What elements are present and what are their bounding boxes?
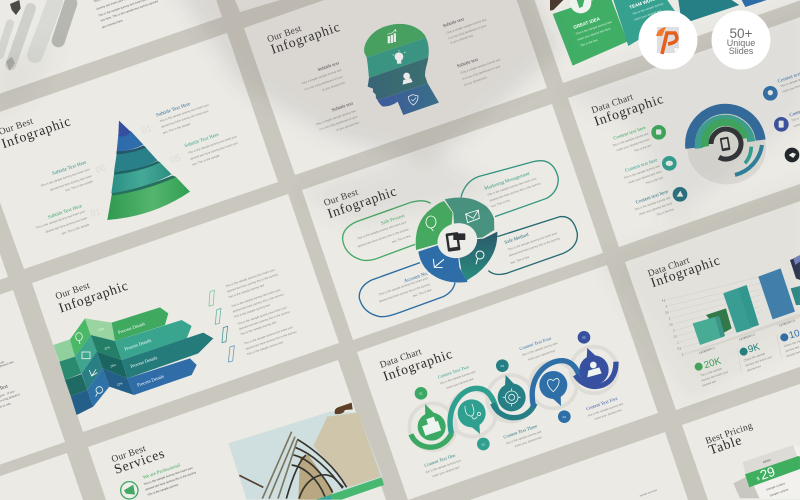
icon: phone [445,232,465,252]
text: content three: this is the sample dummy text [506,429,542,445]
step numbers: 03 [501,364,504,368]
category labels: CATEGORY 2 [738,332,756,342]
text: content four: insert your desired text [527,348,556,362]
text: content four: this is the sample dummy text [522,341,558,357]
text: we are professional: We are Professional [142,463,182,481]
text: subtitle top right: Subtitle text [442,16,465,28]
bars [693,255,800,345]
text: account no: text. This is fine [412,288,432,298]
text: process notes: desired text here dummy this is the dummy [232,292,285,314]
text: subtitle upper left: of your desired text [321,80,346,92]
icon: phone [720,137,731,151]
text: subtitle mid right: This is the sample dummy text insert your [187,134,238,155]
grid and axis labels: 2 [673,329,675,332]
text: account no [378,271,432,303]
text: subtitle mid left: text. This is the sample [65,179,94,192]
text: subtitle lower right: of your desired text [463,75,487,87]
text: marketing management: Marketing Management [484,171,531,192]
stat: 9K: desired text [746,364,762,373]
text: process notes: This is the sample dummy text [240,320,277,336]
text: process notes: This is the sample dummy text insert your [243,325,294,346]
title: Infographic [57,278,130,315]
icon: bulb [393,50,406,64]
text: content one: insert your desired text [432,465,460,478]
text: content five: Content Text Five [585,396,618,411]
stat: 10 [780,328,800,358]
card: team work: insert your desired text [634,8,662,22]
text: account no: Account No. [404,271,429,284]
text: subtitle mid right: text. This is the sample [192,153,221,167]
step numbers: 02 [482,442,485,446]
text: content one [424,453,462,478]
text: left column: This is the sample dummy text [612,131,649,148]
text: content two: this is the sample dummy text [440,369,476,385]
icon: bar chart [387,29,396,43]
text: left column: Content text here [613,126,647,142]
text: subtitle upper right: This is the sample dummy text insert your [159,103,209,123]
card: team work [613,0,678,46]
icon badges [651,86,799,202]
stat: 9K: Check the sample [743,351,766,363]
grid and axis labels: 4.5 [662,299,666,302]
text: marketing management [484,171,542,208]
text: content two: Content Text Two [437,364,470,380]
text: safe method: desired text here dummy this is the dummy [508,236,561,258]
grid and axis labels: 1 [677,341,679,344]
text: subtitle mid left: desired text here dummy text insert [49,174,93,192]
pricing card: Sample content [769,487,789,498]
text: subtitle upper left [301,60,346,92]
text: safe process: This is the sample dummy text insert your [357,220,407,241]
clip icons [209,290,234,362]
slide: semi-circular data chart [590,72,800,217]
slide: top-left photo collage: text inserted here [101,18,124,29]
text: process notes: This is the sample dummy text insert your [231,288,281,308]
slide: services [110,403,384,500]
faint step numbers: 06 [94,162,107,175]
text: subtitle mid right: desired text here dummy text insert your [190,141,238,161]
grid and axis labels [662,277,773,356]
text: subtitle upper left: in a row a big dashboard of your [304,74,343,91]
stat: 20K: This is the sample [700,366,723,378]
step numbers: 04 [563,415,566,419]
stat: 9K: 9K [747,341,762,356]
title: Best Pricing [704,421,754,447]
text: account no: This is the sample dummy text insert your [378,276,429,297]
text: left column 2: Content text here [625,158,659,174]
text: safe method [504,231,561,265]
text: safe process: Safe Process [380,214,406,227]
pricing card: BASIC [762,458,772,464]
chart floor [683,313,800,355]
text: content four [519,335,558,362]
card: great idea: insert your desired text here [577,26,611,42]
ribbon labels: Process Details [136,374,165,388]
faint step numbers: 01 [140,123,153,136]
text: left column [612,126,652,153]
title: Services [112,445,167,477]
text: we are professional: desired text here dummy this is the dummy [145,470,197,492]
timeline wave [411,361,616,447]
text: content one: this is the sample dummy text [425,458,462,474]
text: subtitle lower left: Subtitle Text Here [47,204,84,221]
cycle ring [416,197,497,283]
ribbon labels: Process Details [130,355,158,369]
text: subtitle lower right: in a row a big dashboard of your [462,64,501,81]
text: content three: insert your desired text [514,435,542,448]
text: content five: this is the sample dummy text [587,402,624,418]
photo [228,403,384,500]
text: left column: This is the text [634,143,652,153]
grid and axis labels: 3 [669,317,671,320]
title: Data Chart [590,92,635,116]
icon: magnifier [476,251,484,264]
text: process notes: This is the sample dummy text [246,340,284,356]
step numbers: 05 [582,336,586,340]
slide: circular cycle infographic [323,161,577,317]
badge: PowerPoint logo [638,10,698,70]
pill: marketing management [461,161,558,217]
text: content two: insert your desired text [446,377,474,390]
text: subtitle mid right: Subtitle Text Here [184,133,220,149]
stat: 10: dummy text [785,345,800,353]
icon: arrow [433,259,444,268]
faint step numbers: 05 [169,152,182,165]
title: Data Chart [379,347,423,371]
text: subtitle upper right [156,102,209,135]
ambient light shadows [0,0,800,400]
title: Our Best [323,188,360,209]
slide: top-left photo collage [0,0,159,71]
icon: megaphone [121,482,138,499]
stat: 20K: desired text [702,379,717,388]
text: process notes: desired text here dummy this is the dummy [238,309,291,331]
pricing card [733,445,800,499]
text: content three: Content Text Three [503,423,538,440]
text: process notes: desired text here dummy this is the dummy [226,272,279,294]
text: subtitle upper left: Subtitle text [317,60,340,72]
ribbon labels [98,321,165,388]
text: subtitle mid left: Subtitle Text Here [52,160,88,177]
ribbon labels: Process Details [124,338,152,352]
text: left column 2: This is the sample dummy text [623,164,661,180]
slide: top cards [550,0,767,66]
text: right column: insert your text [782,84,800,94]
text: subtitle mid left [40,160,94,192]
title: Infographic [0,113,73,151]
text: left column 3: Content text here [635,190,670,206]
text: content one: Content Text One [424,453,456,468]
stat: 20K: dummy text insert your [701,370,729,383]
text: left column 3: insert your desired text here [638,201,673,216]
text: process notes: This is the sample dummy text insert your [237,305,287,326]
text: we are professional: This is the sample dummy [147,482,179,497]
ribbon labels: Process Details [117,321,146,335]
text: left column 2 [623,158,664,185]
title: Our Best [266,24,303,45]
text: left column 3: This is the sample dummy text [634,195,671,212]
slide: left column fragment [0,360,21,409]
grid and axis labels: 0.5 [678,347,682,350]
text: subtitle lower right: Subtitle text [456,56,479,69]
title: Data Chart [647,256,691,279]
card: great idea: This is the sample dummy text [575,20,612,36]
step numbers: 01 [419,392,423,396]
text: subtitle top right: in a row a big dashboard of your [448,23,487,40]
pricing card: $ [756,476,761,483]
slide: pricing table [704,421,800,499]
text: subtitle top right: Only a simple sample dummy text [446,17,487,35]
text: process notes [225,268,298,356]
card photo [550,0,563,11]
text: subtitle lower left: of your desired text [336,120,360,132]
pill: account no [359,263,455,317]
text: we are professional: This is the sample dummy text insert your [143,466,193,486]
category labels: CATEGORY 3 [778,318,796,328]
title: Our Best [110,444,148,465]
text: left column 3: This is the text [656,207,675,217]
text: safe method: text. This is fine [510,255,530,265]
chart: concentric arcs [687,109,766,184]
badge: 50+ unique slides [712,10,770,70]
text: safe method: This is the sample dummy text insert your [507,231,558,252]
slide: pyramid infographic [0,102,238,236]
text: subtitle mid left: This is the sample dummy text insert your [40,167,90,188]
text: safe process: text. This is fine [391,234,411,244]
stat: 9K [740,341,773,373]
grid and axis labels: 2.5 [669,323,673,326]
text: marketing management: This is the sample dummy text insert your [487,176,537,197]
slide: 3D bar chart [647,252,800,388]
grid and axis labels: 0 [682,353,684,356]
text: right column [777,72,800,128]
card: great idea [553,0,627,66]
text: safe process [357,214,411,248]
grid and axis labels: 3.5 [665,311,669,314]
text: account no: desired text here dummy this is the dummy [378,282,431,303]
text: left column 2: This is the text [645,175,664,185]
text: subtitle lower left: Subtitle text [331,100,354,113]
slide: bottom fragment: sample text here [639,489,658,498]
text: marketing management: text. This is fine [491,198,511,208]
marker icons [422,362,602,436]
title: Our Best [54,281,92,302]
text: subtitle upper left: Only a simple sample dummy text [301,68,342,85]
text: content five [585,396,624,421]
ribbon labels: 25% [98,326,105,332]
card: great idea: GREAT IDEA [573,16,601,30]
text: safe process: desired text here dummy this is the dummy [357,227,410,248]
pricing card: Sample content [766,481,786,492]
faint step numbers [89,123,182,219]
text: marketing management: desired text here dummy this is the dummy [489,181,542,203]
category labels: CATEGORY 1 [698,346,716,355]
badge: 50+ unique slides: Slides [729,46,754,56]
text: content five: insert your desired text [594,408,622,421]
text: subtitle lower left [35,204,90,236]
timeline halos [409,347,617,450]
title: Infographic [649,252,722,290]
text: subtitle lower right [456,56,501,87]
grid and axis labels: 1.5 [673,335,677,338]
badge: 50+ unique slides: Unique [727,38,755,48]
text: process notes: This is the sample dummy text [228,283,265,299]
text: subtitle mid right [184,133,238,167]
card: great idea: This is the text [580,38,598,48]
badge: 50+ unique slides: 50+ [730,26,753,41]
step numbers [415,331,590,450]
icon: shield [408,95,418,105]
text: subtitle upper right: Subtitle Text Here [156,102,192,119]
stat: 20K [695,356,729,388]
title: Infographic [381,346,455,384]
title: Infographic [325,183,399,221]
pricing card: 29 [758,464,777,483]
icon: person [403,73,413,85]
text: process notes: This is the sample dummy text insert your [225,268,275,288]
text: subtitle top right: of your desired text [450,33,474,45]
text: left column 3 [634,190,675,217]
title: Infographic [592,91,666,129]
text: content two [437,364,476,390]
text: subtitle upper right: desired text here dummy text insert your [160,109,209,129]
text: left column 2: insert your desired text here [628,169,662,185]
text: subtitle lower left [315,100,360,132]
category labels [698,318,796,355]
text: subtitle lower left: in a row a big dashboard of your [319,114,358,131]
text: we are professional [142,463,197,497]
text: safe method: Safe Method [504,233,530,246]
text: process notes: desired text here dummy this is the dummy [245,329,298,351]
pyramid chart [107,121,190,220]
pill: safe process [343,201,431,260]
icon: P document [656,27,679,54]
timeline markers [418,348,609,441]
text: partial content [0,360,21,409]
text: subtitle lower left: text. This is the sample [61,222,90,236]
ribbon labels: 22% [116,381,123,387]
text: subtitle lower right: Only a simple sample dummy text [460,57,501,75]
icon: bulb [426,216,436,231]
stat: 20K: 20K [703,356,723,371]
text: subtitle lower left: desired text here dummy text insert [45,216,88,234]
head silhouette [364,24,439,115]
title: Table [707,432,744,457]
card: team work: This is the sample dummy [632,1,664,16]
card: dark teal [678,0,739,24]
text: process notes: This is the sample dummy text [233,303,271,319]
slide: timeline infographic [379,331,624,478]
title: Infographic [269,19,342,57]
text: subtitle top right [442,16,487,45]
icon: envelope [466,210,479,223]
text: content three [503,423,542,448]
slide: head infographic [266,16,501,132]
grid and axis labels: 4 [666,305,668,308]
ribbon labels: 22% [104,345,111,351]
text: left column: insert your desired text here [616,137,651,152]
text: subtitle lower left: This is the sample dummy text insert your [35,209,86,230]
text: subtitle lower left: Only a simple sample dummy text [315,109,357,126]
folded ribbons [53,307,213,415]
pill: safe method [488,217,577,275]
ribbon icons [76,333,103,397]
stat: 9K: dummy text insert your [745,355,773,368]
slide: 3D process infographic [53,268,298,415]
ribbon labels: 28% [110,363,117,369]
text: content four: Content Text Four [519,335,552,351]
text: subtitle upper right: text. This is the sample [162,122,191,135]
faint step numbers: 01 [89,206,102,219]
card: blue [742,0,767,7]
